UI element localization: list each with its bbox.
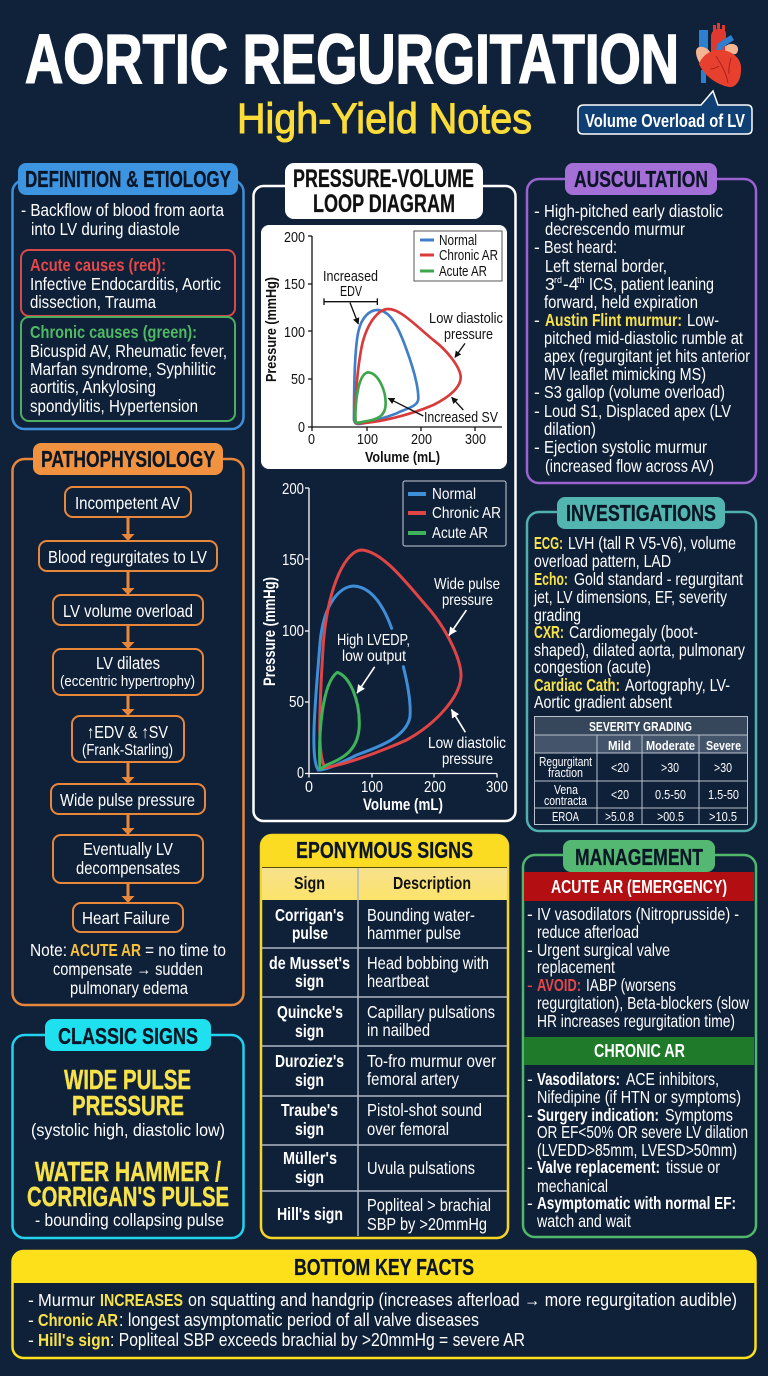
flow box: EDV and SV xyxy=(72,716,184,762)
row: Hill's sign: Hill's sign xyxy=(277,1204,343,1224)
chart: light PV loop xyxy=(261,225,507,469)
text: key facts: - xyxy=(28,1330,34,1350)
legend: Acute AR xyxy=(439,264,487,280)
legend: Chronic AR xyxy=(439,248,498,264)
flow box: incompetent AV xyxy=(65,487,191,517)
heading: definition and etiology xyxy=(18,163,238,195)
chart: light PV loop: 0 xyxy=(308,432,315,448)
chart: dark PV loop: 300 xyxy=(486,779,508,796)
table: severity grading: >10.5 xyxy=(709,810,737,824)
text: chronic AR list: - xyxy=(527,1069,533,1089)
chart: dark PV loop: Pressure (mmHg) xyxy=(261,577,279,686)
table: severity grading: Mild xyxy=(608,738,631,753)
heading: bottom key facts xyxy=(12,1251,756,1283)
row: Müller's sign: Müller's xyxy=(283,1148,337,1168)
heading: bottom key facts: BOTTOM KEY FACTS xyxy=(294,1254,474,1280)
text: investigations list: grading xyxy=(534,605,581,625)
text: wide pulse pressure: PRESSURE xyxy=(72,1090,184,1121)
table: severity grading: >30 xyxy=(661,761,679,775)
row: Müller's sign: sign xyxy=(295,1167,324,1187)
text: chronic AR list: Valve replacement: xyxy=(537,1157,660,1177)
text: chronic AR list: ACE inhibitors, xyxy=(626,1069,719,1089)
text: chronic AR list: Surgery indication: xyxy=(537,1105,659,1125)
text: definition xyxy=(21,200,224,239)
text: key facts: Murmur xyxy=(38,1290,95,1310)
chart: light PV loop: 0 xyxy=(298,420,305,436)
flow box: heart failure xyxy=(73,903,183,932)
text: definition: - Backflow of blood from aorta xyxy=(21,200,224,220)
table: severity grading: contracta xyxy=(544,794,587,808)
panel: bottom key facts xyxy=(12,1251,756,1358)
text: investigations list: Echo: xyxy=(534,569,568,589)
row: de Musset's sign: Head bobbing with xyxy=(367,953,489,973)
panel: investigations xyxy=(527,497,756,831)
heading: eponymous signs: EPONYMOUS SIGNS xyxy=(296,837,473,863)
box: acute causes xyxy=(21,250,235,316)
flow box: EDV and SV: ↑EDV & ↑SV xyxy=(87,722,168,742)
chart: light PV loop: pressure xyxy=(444,327,493,343)
table: severity grading: Vena xyxy=(554,783,578,797)
text: key facts: - xyxy=(28,1310,34,1330)
text: auscultation list: - xyxy=(534,401,540,421)
row: Traube's sign: over femoral xyxy=(367,1119,449,1139)
note: acute AR: compensate → sudden xyxy=(53,959,203,979)
row: Corrigan's pulse: Corrigan's xyxy=(275,905,344,925)
chart: dark PV loop xyxy=(261,481,508,814)
text: key facts: Chronic AR xyxy=(38,1310,118,1330)
text: water hammer: WATER HAMMER / xyxy=(35,1156,221,1187)
row: Quincke's sign: in nailbed xyxy=(367,1020,430,1040)
chart: dark PV loop: 100 xyxy=(282,623,304,640)
row: Duroziez's sign: femoral artery xyxy=(367,1069,459,1089)
note: acute AR: ACUTE AR xyxy=(70,940,141,960)
text: acute AR list xyxy=(527,904,749,1031)
text: auscultation list: - xyxy=(534,237,540,257)
chart: dark PV loop: pressure xyxy=(442,592,493,609)
chart: light PV loop: 100 xyxy=(357,432,378,448)
chart: light PV loop: EDV xyxy=(340,284,362,300)
row: Duroziez's sign: To-fro murmur over xyxy=(367,1051,496,1071)
flow box: LV volume overload xyxy=(53,595,203,625)
chart: dark PV loop: 200 xyxy=(282,481,304,498)
heading: definition and etiology: DEFINITION & ETIOLOGY xyxy=(25,166,231,192)
row: Quincke's sign: Capillary pulsations xyxy=(367,1002,495,1022)
text: water hammer: - bounding collapsing pulse xyxy=(35,1210,224,1230)
row: Hill's sign xyxy=(277,1195,491,1234)
chart: light PV loop: 150 xyxy=(284,277,305,293)
chart: dark PV loop: High LVEDP, xyxy=(337,632,410,649)
text: investigations list: CXR: xyxy=(534,622,564,642)
row: Duroziez's sign: sign xyxy=(295,1070,324,1090)
row: Quincke's sign: Quincke's xyxy=(277,1002,343,1022)
text: investigations list: Cardiomegaly (boot- xyxy=(569,622,698,642)
flow box: wide pulse pressure xyxy=(51,784,205,814)
text: investigations list xyxy=(533,533,745,712)
chart: dark PV loop: Wide pulse xyxy=(434,576,500,593)
chart: light PV loop: 300 xyxy=(465,432,486,448)
text: auscultation list: MV leaflet mimicking MS) xyxy=(544,364,706,384)
table: severity grading: Severe xyxy=(706,738,741,753)
legend xyxy=(414,231,502,281)
text: auscultation list: Austin Flint murmur: xyxy=(545,310,682,330)
chart: dark PV loop: Low diastolic xyxy=(428,735,506,752)
text: wide pulse pressure xyxy=(31,1064,225,1140)
flow box: blood regurgitates: Blood regurgitates to LV xyxy=(48,547,207,567)
box: chronic causes: spondylitis, Hypertension xyxy=(30,396,198,416)
row: Traube's sign: Traube's xyxy=(281,1100,338,1120)
chart: dark PV loop: Volume (mL) xyxy=(363,796,443,814)
subtitle: High-Yield Notes xyxy=(237,95,532,143)
chart: light PV loop: 100 xyxy=(284,325,305,341)
band: chronic AR xyxy=(524,1037,754,1065)
text: acute AR list: replacement xyxy=(537,957,615,977)
flow box: decompensates xyxy=(53,835,203,883)
text: auscultation list: - xyxy=(534,310,540,330)
row: Traube's sign: sign xyxy=(295,1119,324,1139)
heading: pathophysiology xyxy=(33,443,223,475)
chart: light PV loop: Increased xyxy=(323,269,378,285)
band: acute AR xyxy=(524,872,754,901)
text: investigations list: ECG: xyxy=(534,533,563,553)
chart: light PV loop: Increased SV xyxy=(424,410,498,426)
text: auscultation list: Low- xyxy=(687,310,719,330)
text: key facts: - xyxy=(28,1290,34,1310)
flow box: incompetent AV: Incompetent AV xyxy=(75,493,180,513)
text: auscultation list: dilation) xyxy=(544,419,596,439)
text: investigations list: congestion (acute) xyxy=(534,657,651,677)
text: auscultation list: ICS, patient leaning xyxy=(589,274,714,294)
flow box: LV dilates xyxy=(53,649,203,695)
text: auscultation list: - xyxy=(534,382,540,402)
box: acute causes: Infective Endocarditis, Aortic xyxy=(30,274,221,294)
chart: dark PV loop: 0 xyxy=(297,765,304,782)
text: chronic AR list: tissue or xyxy=(666,1157,720,1177)
text: chronic AR list: - xyxy=(527,1157,533,1177)
row: Hill's sign: SBP by >20mmHg xyxy=(367,1214,487,1234)
heading: pressure-volume: PRESSURE-VOLUME xyxy=(293,165,474,193)
arrows: flow xyxy=(122,517,134,903)
row: Müller's sign xyxy=(283,1148,475,1187)
note: acute AR xyxy=(30,940,226,998)
icon: heart xyxy=(696,23,741,87)
text: chronic AR list: mechanical xyxy=(537,1176,608,1196)
text: chronic AR list: Symptoms xyxy=(665,1105,733,1125)
box: acute causes: dissection, Trauma xyxy=(30,292,156,312)
text: auscultation list: -4 xyxy=(563,274,579,294)
heading: management xyxy=(563,840,715,872)
table: severity grading: 1.5-50 xyxy=(708,788,739,802)
text: auscultation list: Ejection systolic murmur xyxy=(544,437,707,457)
legend: Chronic AR xyxy=(432,505,501,522)
flow box: EDV and SV: (Frank-Starling) xyxy=(82,742,173,759)
text: auscultation list: - xyxy=(534,201,540,221)
text: auscultation list: decrescendo murmur xyxy=(545,219,685,239)
chart: dark PV loop: 100 xyxy=(361,779,383,796)
box: chronic causes: Bicuspid AV, Rheumatic fever, xyxy=(30,341,227,361)
table: severity grading: SEVERITY GRADING xyxy=(589,719,692,734)
row: Corrigan's pulse xyxy=(275,905,475,943)
heading: eponymous signs xyxy=(261,835,508,867)
text: acute AR list: reduce afterload xyxy=(537,922,639,942)
text: auscultation list: forward, held expiration xyxy=(544,292,698,312)
legend: Acute AR xyxy=(432,525,488,542)
table: severity grading: <20 xyxy=(611,761,629,775)
note: acute AR: pulmonary edema xyxy=(70,978,188,998)
text: chronic AR list: watch and wait xyxy=(536,1211,631,1231)
box: chronic causes: aortitis, Ankylosing xyxy=(30,377,156,397)
table: severity grading: >00.5 xyxy=(657,810,684,824)
row: Duroziez's sign xyxy=(275,1051,496,1090)
heading: classic signs: CLASSIC SIGNS xyxy=(58,1023,198,1049)
flow box: LV volume overload: LV volume overload xyxy=(63,601,193,621)
flow box: LV dilates: LV dilates xyxy=(96,653,160,673)
table: severity grading: >5.0.8 xyxy=(605,810,634,824)
table: severity grading xyxy=(534,716,748,824)
text: auscultation list: Best heard: xyxy=(544,237,617,257)
text: acute AR list: Urgent surgical valve xyxy=(537,940,670,960)
heading: investigations xyxy=(557,497,725,529)
text: investigations list: Aortic gradient absent xyxy=(534,692,672,712)
flow box: decompensates: Eventually LV xyxy=(83,839,173,859)
text: acute AR list: - xyxy=(527,904,533,924)
table: sign header xyxy=(262,868,507,900)
heading: management: MANAGEMENT xyxy=(575,844,703,870)
heading: pathophysiology: PATHOPHYSIOLOGY xyxy=(41,446,215,472)
flow box: decompensates: decompensates xyxy=(76,858,180,878)
row: Corrigan's pulse: hammer pulse xyxy=(367,923,461,943)
table: severity grading: EROA xyxy=(552,810,579,824)
text: auscultation list: High-pitched early diastolic xyxy=(544,201,723,221)
table: severity grading: fraction xyxy=(548,766,583,780)
row: Corrigan's pulse: pulse xyxy=(292,923,328,943)
flow box: heart failure: Heart Failure xyxy=(82,908,170,928)
text: acute AR list: AVOID: xyxy=(537,975,581,995)
text: water hammer: CORRIGAN'S PULSE xyxy=(27,1181,229,1212)
text: acute AR list: IABP (worsens xyxy=(586,975,676,995)
text: key facts xyxy=(28,1290,737,1350)
row: de Musset's sign: de Musset's xyxy=(269,953,350,973)
text: acute AR list: - xyxy=(527,940,533,960)
note: acute AR: = no time to xyxy=(145,940,226,960)
text: chronic AR list xyxy=(527,1069,748,1231)
table: severity grading: <20 xyxy=(611,788,629,802)
panel: auscultation xyxy=(527,163,756,483)
table: severity grading: Moderate xyxy=(646,738,695,753)
text: auscultation list: - xyxy=(534,437,540,457)
text: investigations list: Aortography, LV- xyxy=(625,675,730,695)
text: key facts: : longest asymptomatic period of all valve diseases xyxy=(119,1310,479,1330)
text: auscultation list: Loud S1, Displaced apex (LV xyxy=(544,401,731,421)
row: de Musset's sign: heartbeat xyxy=(367,971,429,991)
row: Quincke's sign xyxy=(277,1002,495,1041)
chart: dark PV loop: 200 xyxy=(424,779,446,796)
legend xyxy=(403,481,506,546)
heading: auscultation: AUSCULTATION xyxy=(574,166,708,192)
legend: Normal xyxy=(439,233,477,249)
band: chronic AR: CHRONIC AR xyxy=(594,1040,685,1061)
heading: classic signs xyxy=(45,1019,211,1051)
text: auscultation list: 3 xyxy=(545,274,555,294)
box: acute causes: Acute causes (red): xyxy=(30,255,166,275)
row: Duroziez's sign: Duroziez's xyxy=(275,1051,344,1071)
panel: pathophysiology xyxy=(12,443,244,1005)
text: key facts: : Popliteal SBP exceeds brachial by >20mmHg = severe AR xyxy=(110,1330,525,1350)
chart: light PV loop: Low diastolic xyxy=(429,311,503,327)
chart: light PV loop: 50 xyxy=(291,372,305,388)
chart: dark PV loop: 0 xyxy=(305,779,313,796)
text: auscultation list: rd xyxy=(554,275,562,285)
text: key facts: Hill's sign xyxy=(38,1330,110,1350)
panel: management xyxy=(523,840,756,1237)
box: chronic causes: Marfan syndrome, Syphilitic xyxy=(30,359,216,379)
row: Hill's sign: Popliteal > brachial xyxy=(367,1195,491,1215)
box: chronic causes xyxy=(21,317,235,421)
panel: classic signs xyxy=(12,1019,244,1238)
text: auscultation list: th xyxy=(577,275,585,285)
table: severity grading: >30 xyxy=(714,761,732,775)
heading: investigations: INVESTIGATIONS xyxy=(566,500,716,526)
row: Corrigan's pulse: Bounding water- xyxy=(367,905,475,925)
legend: Normal xyxy=(432,486,476,503)
text: definition: into LV during diastole xyxy=(31,219,180,239)
chart: light PV loop: 200 xyxy=(411,432,432,448)
chart: dark PV loop: 50 xyxy=(289,694,304,711)
text: investigations list: Cardiac Cath: xyxy=(534,675,620,695)
text: wide pulse pressure: (systolic high, diastolic low) xyxy=(31,1120,225,1140)
chart: dark PV loop: low output xyxy=(342,648,406,665)
text: chronic AR list: - xyxy=(527,1105,533,1125)
row: de Musset's sign: sign xyxy=(295,971,324,991)
text: investigations list: overload pattern, LAD xyxy=(534,551,671,571)
text: key facts: INCREASES xyxy=(100,1290,183,1310)
table: severity grading: Regurgitant xyxy=(539,755,592,769)
text: wide pulse pressure: WIDE PULSE xyxy=(64,1064,191,1095)
text: chronic AR list: - xyxy=(527,1193,533,1213)
flow box: LV dilates: (eccentric hypertrophy) xyxy=(60,674,195,690)
table: severity grading: 0.5-50 xyxy=(655,788,686,802)
heading: pressure-volume xyxy=(285,163,483,219)
chart: dark PV loop: 150 xyxy=(282,552,304,569)
text: auscultation list: S3 gallop (volume overload) xyxy=(544,382,725,402)
table: sign header: Description xyxy=(393,873,471,893)
text: auscultation list: Left sternal border, xyxy=(545,256,667,276)
heading: pressure-volume: LOOP DIAGRAM xyxy=(313,190,455,218)
chart: dark PV loop: pressure xyxy=(442,751,493,768)
flow box: wide pulse pressure: Wide pulse pressure xyxy=(60,790,195,810)
table: sign header: Sign xyxy=(294,873,325,893)
chart: light PV loop: Volume (mL) xyxy=(365,449,440,466)
row: Traube's sign: Pistol-shot sound xyxy=(367,1100,482,1120)
flow box: blood regurgitates xyxy=(39,541,217,571)
heading: auscultation xyxy=(565,163,717,195)
row: Müller's sign: Uvula pulsations xyxy=(367,1158,475,1178)
chart: light PV loop: 200 xyxy=(284,230,305,246)
panel: pressure-volume loops xyxy=(254,163,516,821)
callout: volume overload xyxy=(578,91,752,134)
row: de Musset's sign xyxy=(269,953,489,991)
row: Traube's sign xyxy=(281,1100,482,1139)
row: Quincke's sign: sign xyxy=(295,1021,324,1041)
text: acute AR list: - xyxy=(527,975,533,995)
box: chronic causes: Chronic causes (green): xyxy=(30,322,197,342)
text: water hammer xyxy=(27,1156,229,1230)
text: auscultation list xyxy=(534,201,750,476)
text: auscultation list: (increased flow across AV) xyxy=(545,456,714,476)
panel: definition and etiology xyxy=(12,163,244,429)
panel: eponymous signs xyxy=(261,835,508,1238)
chart: light PV loop: Pressure (mmHg) xyxy=(263,277,280,382)
text: chronic AR list: Vasodilators: xyxy=(537,1069,620,1089)
note: acute AR: Note: xyxy=(30,940,67,960)
